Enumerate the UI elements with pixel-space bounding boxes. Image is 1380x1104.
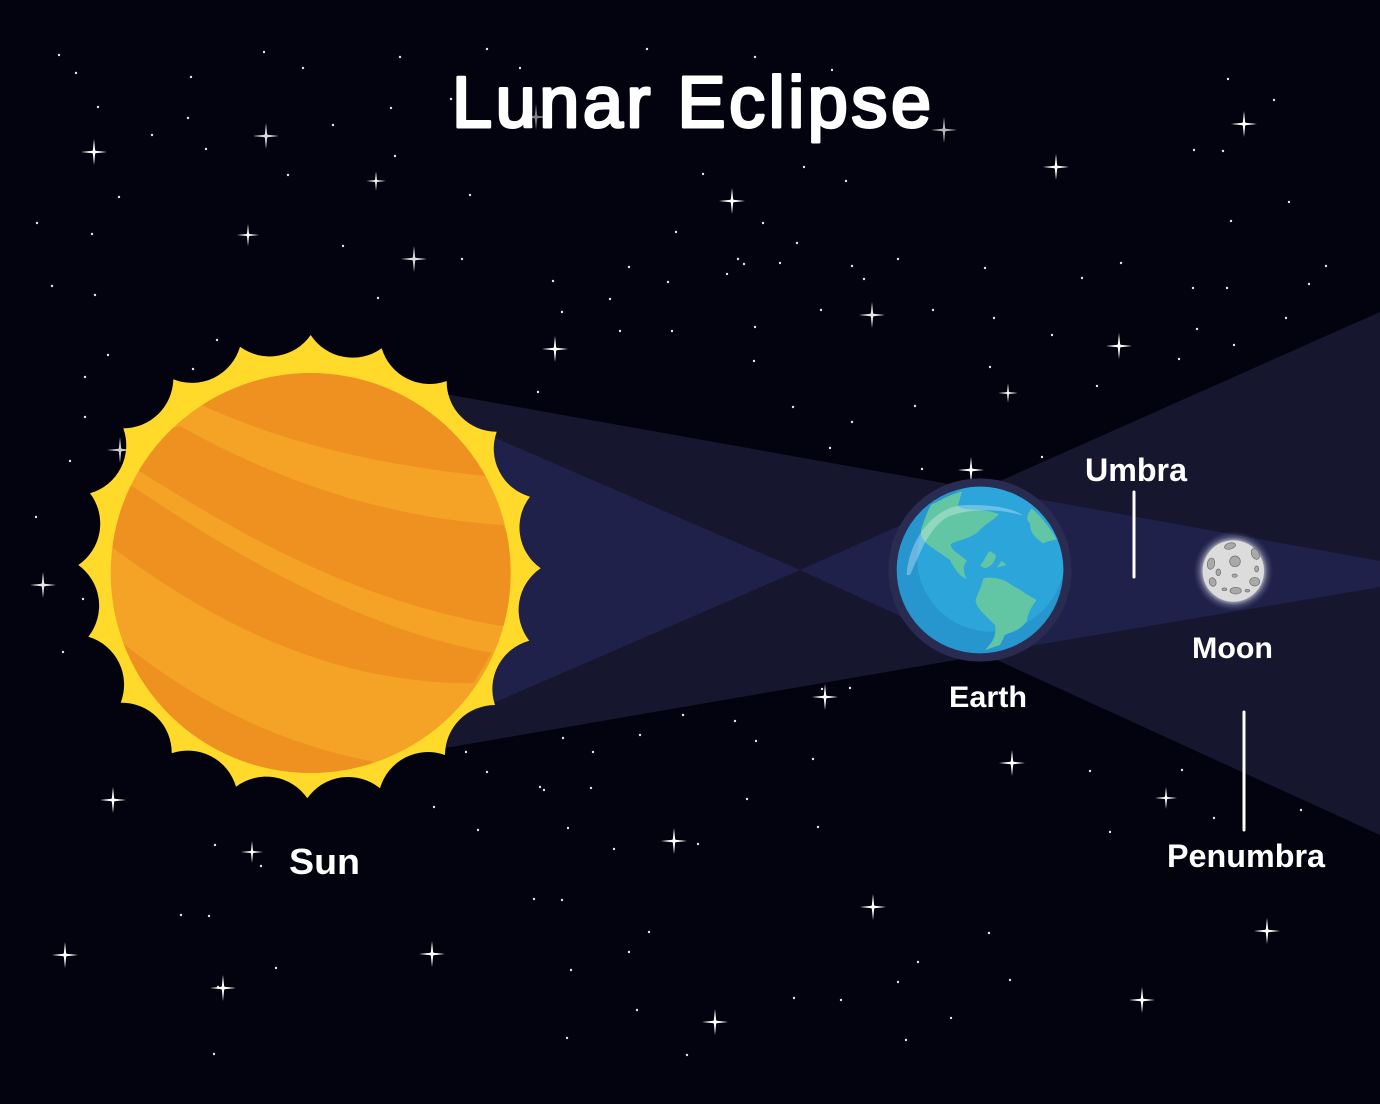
label: moon: Moon: [1192, 632, 1273, 665]
label: umbra: Umbra: [1085, 452, 1187, 488]
umbra pointer line: [1132, 492, 1136, 577]
sun: [78, 335, 543, 820]
umbra cone: [800, 489, 1380, 654]
earth globe: [897, 487, 1063, 653]
title: Lunar Eclipse: [452, 63, 931, 143]
sunlight beam: [445, 394, 1380, 748]
sun corona: [78, 335, 541, 798]
bright converging light: [470, 427, 800, 713]
continents: [921, 492, 1057, 650]
earth: [888, 478, 1072, 662]
penumbra cone: [800, 312, 1380, 835]
light and shadow cones: [445, 312, 1380, 835]
moon craters: [1206, 542, 1261, 594]
sun disc with bands: [110, 373, 511, 773]
four-point stars: [30, 104, 1280, 1035]
label: earth: Earth: [949, 681, 1027, 714]
moon disc: [1203, 540, 1264, 602]
label: penumbra: Penumbra: [1167, 838, 1325, 874]
moon: [1193, 531, 1273, 611]
label: sun: Sun: [289, 841, 360, 882]
penumbra pointer line: [1242, 712, 1246, 830]
earth highlight: [907, 505, 1023, 575]
moon glow: [1193, 531, 1273, 611]
earth halo: [888, 478, 1072, 662]
